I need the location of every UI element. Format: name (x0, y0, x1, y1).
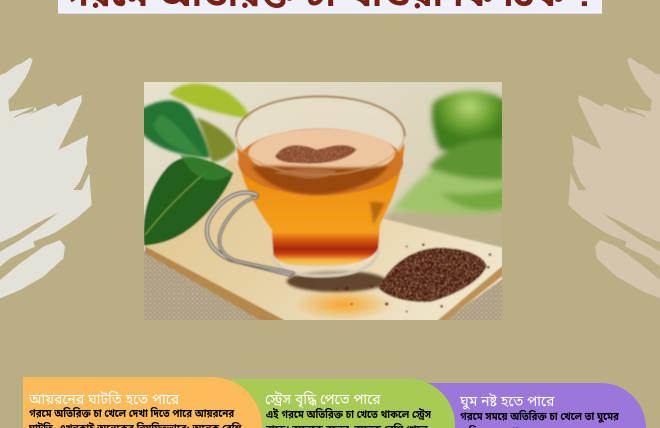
board (145, 156, 506, 324)
cup (236, 96, 405, 276)
panel: stress (green) (200, 379, 455, 428)
photo: cup of tea on wooden board (144, 82, 502, 320)
green leaf (143, 155, 233, 246)
tea leaves on surface (275, 145, 357, 164)
panel: sleep loss (purple) (400, 383, 646, 428)
title banner (58, 0, 602, 14)
panel: iron deficiency (orange) (23, 377, 262, 428)
handle (207, 193, 293, 275)
backdrop (144, 82, 502, 252)
brush stroke: right (568, 58, 660, 298)
brush stroke: left (0, 58, 92, 298)
panel heading: sleep: ঘুম নষ্ট হতে পারে (460, 393, 554, 409)
panel text: stress (266, 408, 432, 428)
blurred leaves: right (392, 91, 506, 215)
panel text: sleep (460, 410, 619, 428)
panel text: iron (28, 407, 242, 428)
blurred leaves: upper left (140, 84, 250, 162)
panel heading: iron: আয়রনের ঘাটতি হতে পারে (29, 391, 179, 407)
panel text: stress: এই গরমে অতিরিক্ত চা খেতে থাকলে স্ট্রেস (266, 409, 431, 421)
loose tea pile (378, 248, 487, 302)
panel text: iron: গরমে অতিরিক্ত চা খেলে দেখা দিতে পারে আয়রনের (29, 408, 234, 420)
panel text: sleep: গরমে সময়ে অতিরিক্ত চা খেলে তা ঘুমের (460, 411, 619, 423)
panel heading: stress: স্ট্রেস বৃদ্ধি পেতে পারে (265, 391, 381, 407)
